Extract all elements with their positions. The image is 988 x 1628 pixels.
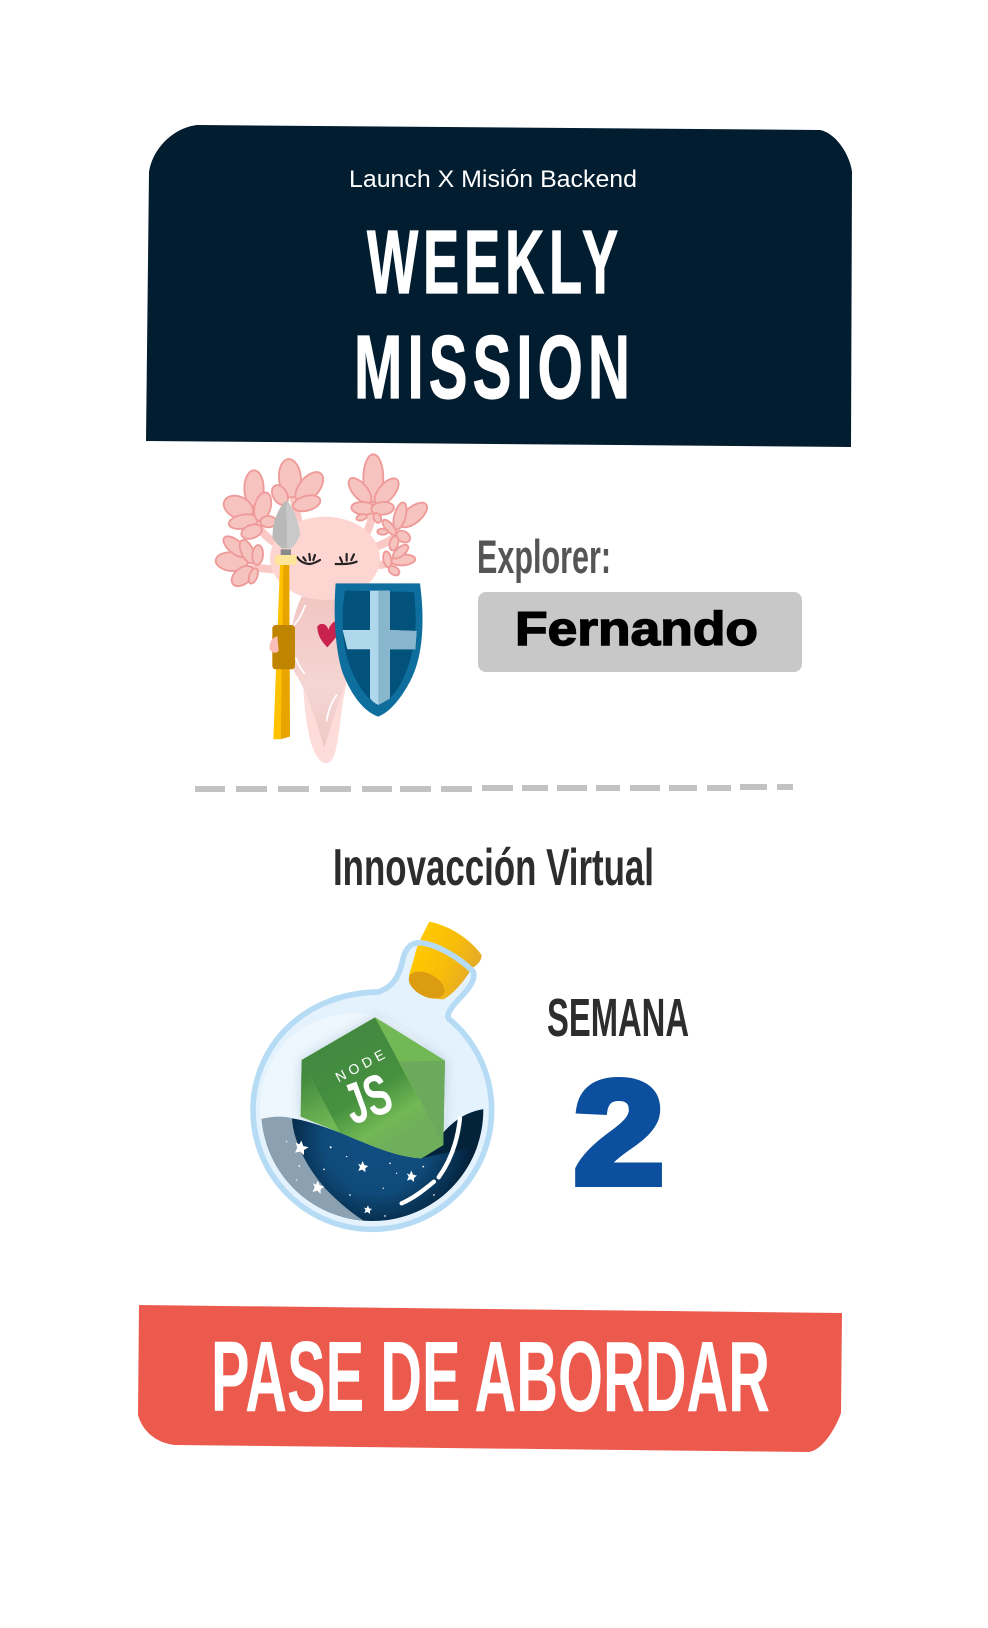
glass outline xyxy=(253,943,492,1229)
subtitle: Launch X Misión Backend: Launch X Misión Backend xyxy=(349,166,637,193)
number: week 2: 2 xyxy=(574,1051,664,1214)
illustration: Node.js flask xyxy=(253,922,497,1243)
illustration: axolotl with spear and shield xyxy=(215,454,431,763)
JS text: JS xyxy=(335,1061,400,1137)
stars xyxy=(286,1141,435,1217)
white arc xyxy=(402,1118,460,1203)
heading: Innovacción Virtual: Innovacción Virtual xyxy=(333,839,654,897)
heading: MISSION: MISSION xyxy=(354,318,635,418)
NODE text: NODE xyxy=(333,1044,391,1085)
panel: header xyxy=(146,125,852,447)
cork xyxy=(404,922,482,1004)
Node.js cube xyxy=(301,1017,445,1158)
liquid xyxy=(262,1109,484,1221)
banner: PASE DE ABORDAR xyxy=(138,1305,842,1452)
name text: Fernando xyxy=(515,602,758,655)
label: SEMANA: SEMANA xyxy=(547,988,689,1048)
name box: Fernando xyxy=(478,592,802,672)
label: Explorer: Explorer: xyxy=(477,530,611,583)
heading: WEEKLY: WEEKLY xyxy=(367,213,623,313)
